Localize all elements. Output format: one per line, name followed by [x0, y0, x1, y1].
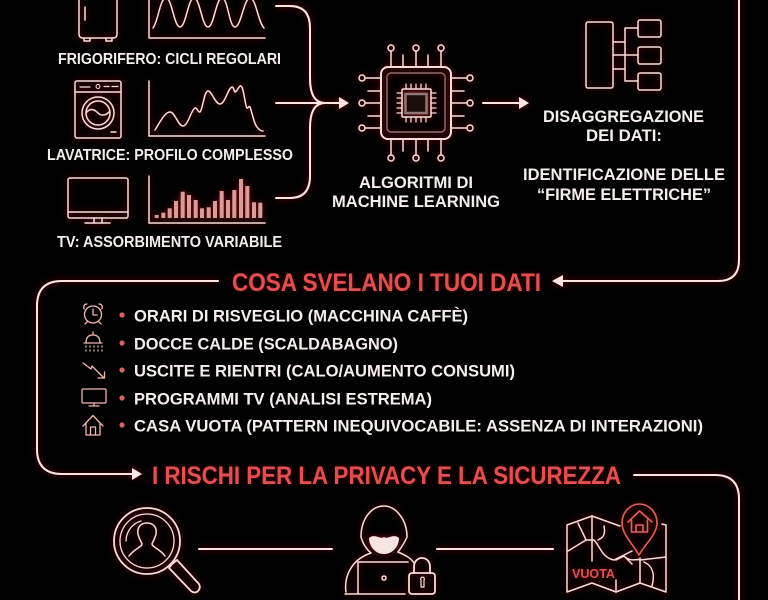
icon: shower [84, 332, 102, 351]
list: revealed habits [82, 304, 703, 436]
icon: map with empty home pin [567, 504, 666, 592]
text: disaggregation: “FIRME ELETTRICHE” [537, 186, 711, 204]
text: disaggregation [523, 108, 725, 204]
label: algorithms [332, 174, 500, 211]
chart: fridge regular cycles [149, 0, 265, 38]
connector line: profile to hacker [199, 548, 332, 550]
chart: TV variable absorption [149, 176, 265, 223]
connector line: hacker to map [437, 548, 553, 550]
icon: hooded hacker with lock [345, 506, 435, 594]
icon: alarm clock [84, 304, 102, 324]
icon: AI chip [359, 45, 473, 161]
label: algorithms: MACHINE LEARNING [332, 193, 500, 211]
bullet and text: wake-up times: ORARI DI RISVEGLIO (MACCHINA CAFFÈ) [134, 306, 468, 326]
label: vuota: VUOTA [572, 566, 616, 581]
icon: magnifier with person [114, 508, 200, 592]
heading: rischi: I RISCHI PER LA PRIVACY E LA SICUREZZA [152, 462, 621, 490]
label: washing machine: LAVATRICE: PROFILO COMPLESSO [47, 147, 293, 164]
icon: television [68, 178, 128, 223]
bullet and text: TV programmes: PROGRAMMI TV (ANALISI ESTREMA) [134, 390, 432, 408]
text: disaggregation: DISAGGREGAZIONE [543, 108, 704, 126]
label: algorithms: ALGORITMI DI [359, 174, 473, 192]
icon: small TV [82, 389, 106, 406]
chart: washing machine complex profile [149, 81, 265, 136]
bullet and text: hot showers: DOCCE CALDE (SCALDABAGNO) [134, 336, 398, 354]
icon: fridge [79, 0, 117, 41]
arrow: flow into data section [552, 0, 739, 287]
arrow: algorithms to disaggregation [483, 97, 529, 109]
bullet and text: exits and returns: USCITE E RIENTRI (CALO/AUMENTO CONSUMI) [134, 362, 515, 380]
label: fridge: FRIGORIFERO: CICLI REGOLARI [58, 51, 281, 68]
arrow: bracket converging into algorithms [276, 6, 349, 198]
text: disaggregation: IDENTIFICAZIONE DELLE [523, 166, 725, 184]
icon: small house [83, 416, 103, 435]
text: disaggregation: DEI DATI: [586, 127, 662, 145]
icon: disaggregation diagram [586, 20, 661, 90]
arrow: flow leaving risks section [634, 475, 739, 600]
icon: washing machine [75, 81, 121, 138]
icon: falling trend arrow [83, 363, 104, 378]
label: TV: TV: ASSORBIMENTO VARIABILE [57, 234, 282, 251]
arrow: flow into risks section [37, 281, 218, 480]
bullet and text: empty home: CASA VUOTA (PATTERN INEQUIVOCABILE: ASSENZA DI INTERAZIONI) [134, 418, 703, 436]
heading: cosa svelano: COSA SVELANO I TUOI DATI [232, 269, 541, 297]
